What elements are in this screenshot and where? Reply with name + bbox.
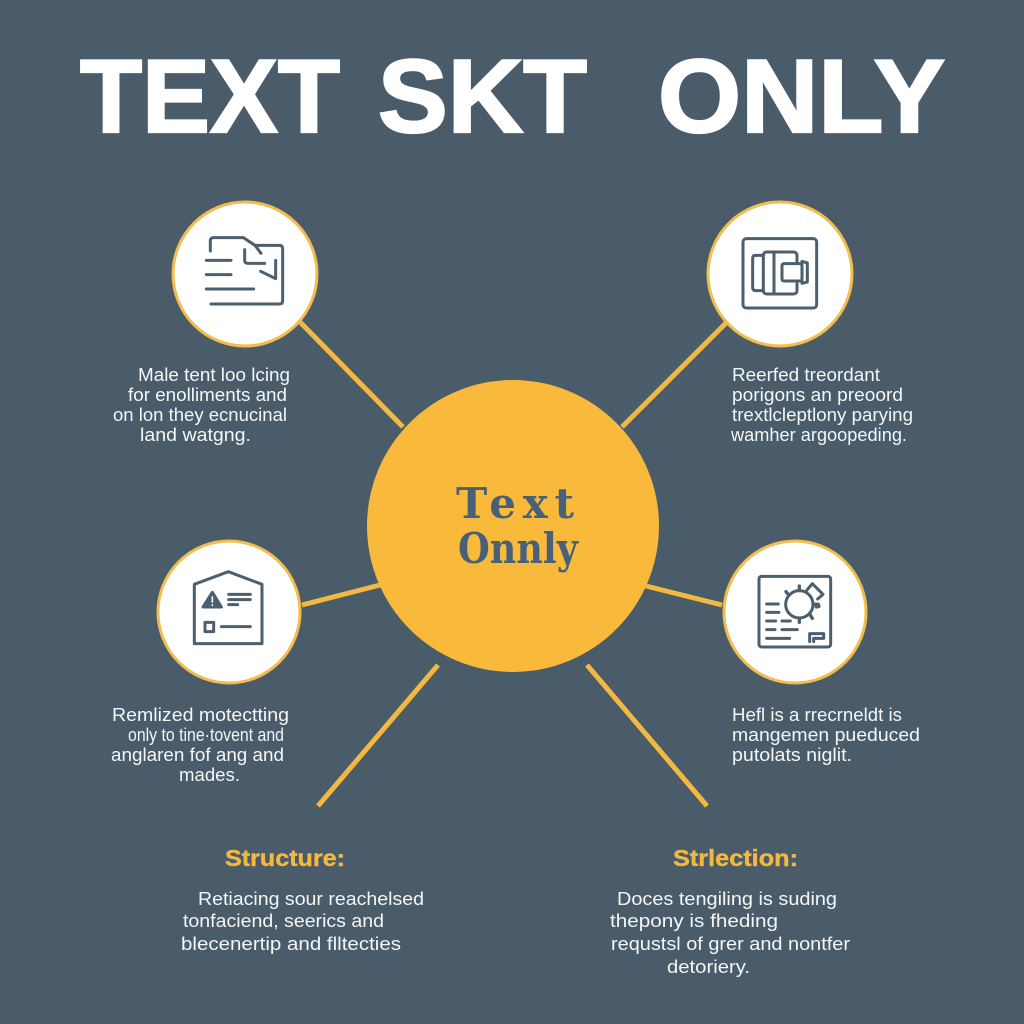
- text block: middle left: Remlized motectting: [112, 705, 289, 725]
- text block: bottom right: thepony is fheding: [610, 911, 778, 931]
- text block: top left: Male tent loo lcing: [138, 365, 290, 385]
- heading: structure: Structure:: [225, 845, 345, 871]
- text block: bottom left: tonfaciend, seerics and: [183, 911, 384, 931]
- text block: top right: trextlcleptlony parying: [732, 405, 913, 425]
- connector: middle left: [302, 585, 380, 605]
- text block: top right: wamher argoopeding.: [730, 425, 907, 445]
- title: [80, 39, 945, 155]
- connector: bottom left: [318, 665, 438, 806]
- text block: middle left: only to tine·tovent and: [128, 725, 284, 745]
- title: TEXT: [80, 39, 340, 155]
- text block: bottom right: detoriery.: [667, 957, 750, 977]
- text block: bottom right: requstsl of grer and nontfer: [611, 934, 850, 954]
- text block: middle left: [111, 705, 289, 785]
- text block: middle left: anglaren fof ang and: [111, 745, 284, 765]
- connector: middle right: [646, 586, 722, 605]
- connector: top right: [622, 322, 727, 427]
- central hub: Onnly: [458, 524, 579, 573]
- text block: middle right: [732, 705, 920, 765]
- text block: top right: Reerfed treordant: [732, 365, 880, 385]
- heading: strlection: Strlection:: [673, 845, 798, 871]
- icon: document folder: [173, 202, 317, 346]
- text block: middle right: Hefl is a rrecrneldt is: [732, 705, 902, 725]
- text block: top left: on lon they ecnucinal: [113, 405, 287, 425]
- text block: top right: porigons an preoord: [732, 385, 903, 405]
- title: SKT: [378, 39, 587, 155]
- icon: warning document: [158, 541, 300, 683]
- title: ONLY: [658, 39, 945, 155]
- text block: middle right: putolats niglit.: [732, 745, 852, 765]
- text block: middle left: mades.: [179, 765, 240, 785]
- icon: settings document: [724, 541, 866, 683]
- text block: top left: for enolliments and: [128, 385, 287, 405]
- connector: top left: [300, 322, 403, 427]
- text block: bottom right: Doces tengiling is suding: [617, 889, 837, 909]
- text block: top left: land watgng.: [140, 425, 251, 445]
- text block: top left: [113, 365, 290, 445]
- central hub: Text: [456, 479, 575, 528]
- text block: bottom right: [610, 889, 850, 977]
- icon: layered panels: [708, 202, 852, 346]
- connector: bottom right: [587, 665, 707, 806]
- text block: top right: [730, 365, 913, 445]
- text block: bottom left: [181, 889, 424, 954]
- text block: bottom left: Retiacing sour reachelsed: [198, 889, 424, 909]
- text block: middle right: mangemen pueduced: [732, 725, 920, 745]
- central hub: [367, 380, 659, 672]
- text block: bottom left: blecenertip and flltecties: [181, 934, 401, 954]
